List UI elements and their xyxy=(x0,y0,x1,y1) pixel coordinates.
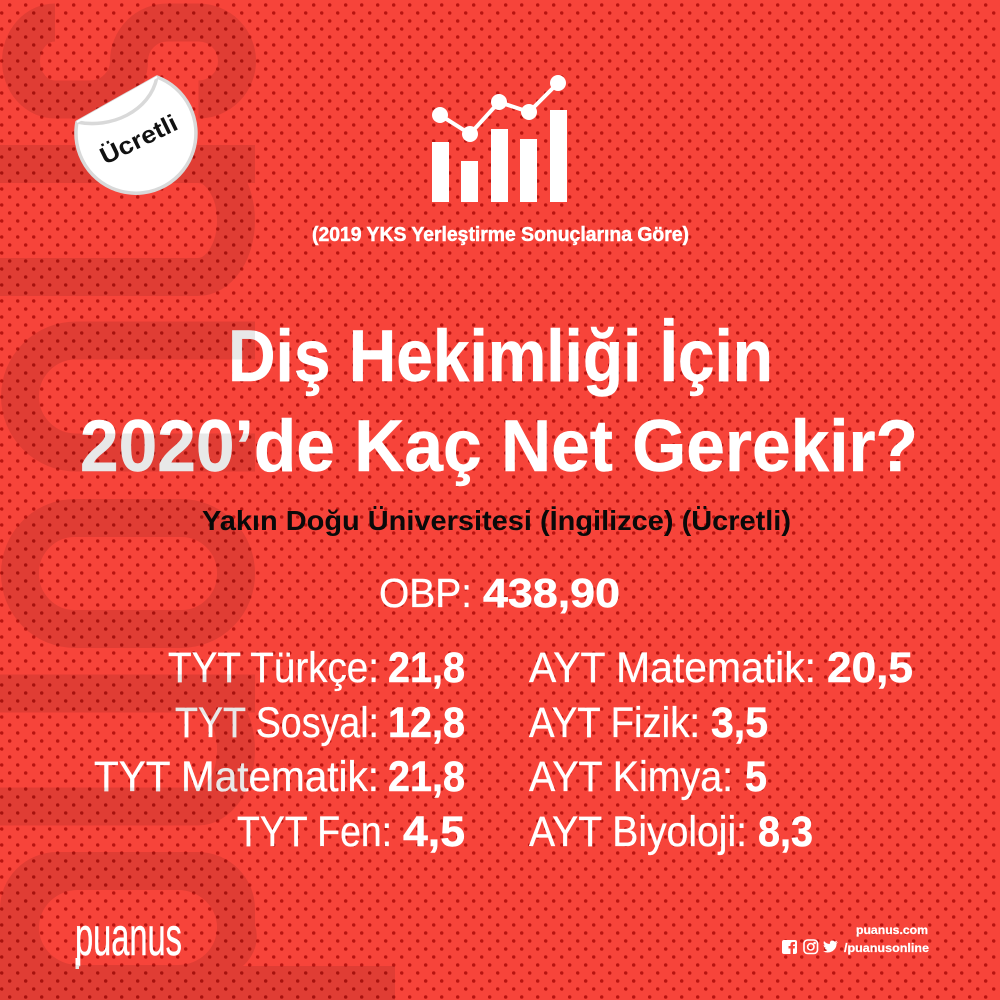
title: Diş Hekimliği İçin xyxy=(228,316,773,397)
TYT nets column: 21,8 xyxy=(388,644,465,692)
logo: puanus: puanus xyxy=(75,907,182,967)
TYT nets column: TYT Sosyal: xyxy=(175,699,379,747)
TYT nets column: TYT Türkçe: xyxy=(168,644,379,692)
AYT nets column: AYT Biyoloji: xyxy=(529,808,747,856)
TYT nets column xyxy=(94,644,465,856)
logo: puanus xyxy=(75,907,182,969)
AYT nets column: 20,5 xyxy=(827,644,913,692)
university name: Yakın Doğu Üniversitesi (İngilizce) (Ücretli) xyxy=(202,505,791,536)
subtitle: (2019 YKS Yerleştirme Sonuçlarına Göre) xyxy=(312,224,689,246)
icon: twitter xyxy=(823,940,838,952)
OBP score: OBP: xyxy=(379,570,472,616)
TYT nets column: 4,5 xyxy=(403,808,465,856)
title xyxy=(80,316,918,487)
sticker: Ücretli: Ücretli xyxy=(96,110,182,170)
TYT nets column: 21,8 xyxy=(388,753,465,801)
AYT nets column xyxy=(529,644,913,856)
OBP score xyxy=(379,570,620,616)
icon: bar and line chart xyxy=(432,75,567,202)
icon: instagram xyxy=(804,940,818,954)
AYT nets column: AYT Fizik: xyxy=(529,699,700,747)
title: 2020’de Kaç Net Gerekir? xyxy=(80,406,918,487)
OBP score: 438,90 xyxy=(483,570,620,616)
website: puanus.com xyxy=(856,923,928,937)
TYT nets column: 12,8 xyxy=(388,699,465,747)
AYT nets column: AYT Matematik: xyxy=(529,644,816,692)
social handle: /puanusonline xyxy=(844,941,929,955)
TYT nets column: TYT Matematik: xyxy=(94,753,379,801)
AYT nets column: 5 xyxy=(745,753,767,801)
icon: facebook xyxy=(782,940,797,954)
sticker: Ücretli xyxy=(76,77,196,193)
TYT nets column: TYT Fen: xyxy=(237,808,392,856)
AYT nets column: 3,5 xyxy=(711,699,768,747)
AYT nets column: 8,3 xyxy=(758,808,813,856)
AYT nets column: AYT Kimya: xyxy=(529,753,733,801)
watermark: large dark background shapes xyxy=(0,22,395,1000)
